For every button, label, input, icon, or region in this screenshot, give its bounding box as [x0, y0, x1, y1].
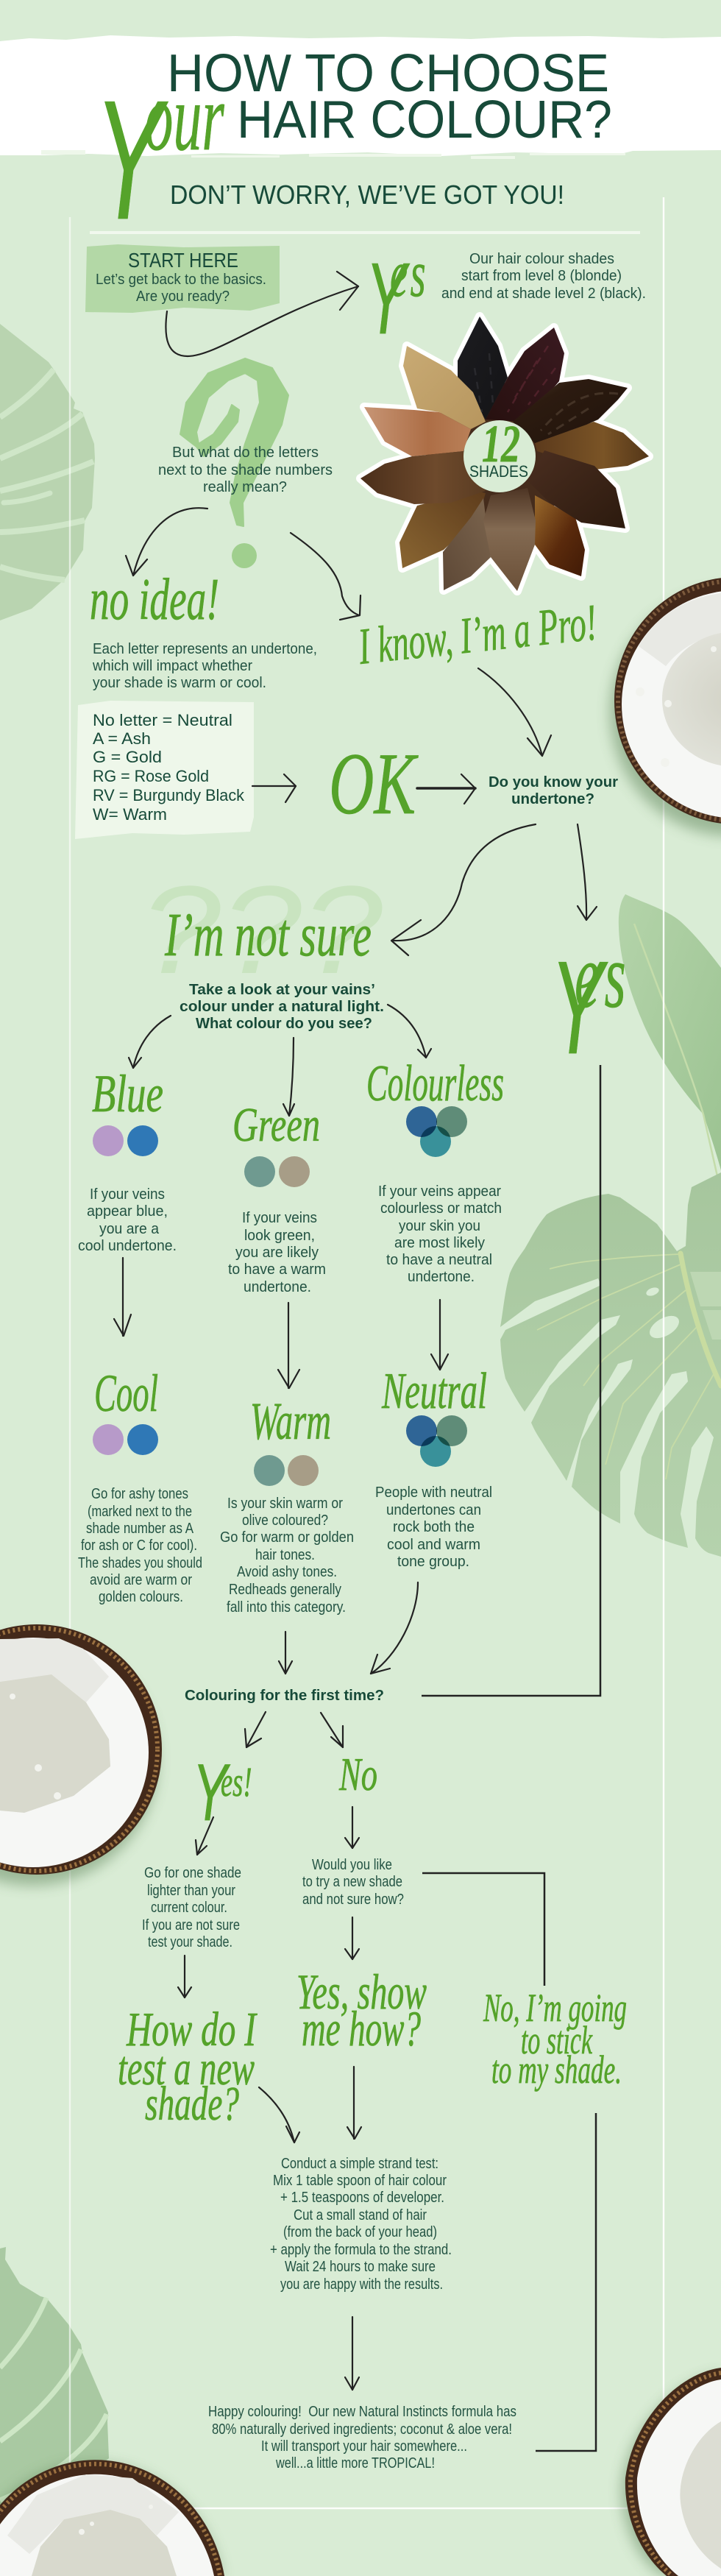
text: warm: Go for warm or golden	[220, 1529, 354, 1546]
arrow: test to happy colouring	[345, 2317, 359, 2390]
script: OK: OK	[329, 735, 419, 832]
icon: question mark	[180, 358, 288, 568]
column: cool	[78, 1364, 202, 1605]
leaf: monstera right	[500, 1172, 721, 1557]
text: blue: you are a	[99, 1221, 160, 1237]
script: no idea: no idea!	[90, 567, 219, 632]
script: how do I test a new shade: How do I	[126, 2003, 258, 2056]
swatches: cool	[93, 1424, 158, 1455]
text: shade levels: start from level 8 (blonde)	[461, 268, 622, 284]
text: green: If your veins	[242, 1210, 317, 1226]
swatches: warm	[254, 1455, 319, 1486]
text: warm: olive coloured?	[242, 1512, 328, 1529]
script: Yes!: es!	[221, 1759, 252, 1805]
column: green: Green	[232, 1098, 320, 1152]
text: strand test: Wait 24 hours to make sure	[285, 2259, 436, 2275]
text: one shade lighter: lighter than your	[147, 1883, 235, 1899]
script: how do I test a new shade: test a new	[118, 2042, 255, 2095]
text: warm: fall into this category.	[227, 1599, 346, 1616]
column: neutral: Neutral	[381, 1363, 487, 1420]
text: cool: (marked next to the	[88, 1504, 192, 1520]
panel: letter key: G = Gold	[93, 748, 162, 766]
column: colourless	[366, 1055, 504, 1285]
script: how do I test a new shade: shade?	[145, 2077, 239, 2131]
leaf: bottom left	[0, 2247, 109, 2508]
start here box: Let’s get back to the basics.	[96, 272, 266, 288]
arrow: to yes	[245, 1712, 266, 1747]
title script word: Your: our	[144, 65, 225, 171]
arrow: to big yes	[578, 824, 597, 920]
script: yes show me how: Yes, show	[296, 1964, 427, 2020]
script: Yes: Y	[366, 242, 410, 355]
start here box: Are you ready?	[136, 289, 230, 305]
question: do you know your undertone: undertone?	[511, 791, 594, 807]
question: look at your veins: Take a look at your vains’	[189, 982, 375, 998]
panel: letter key: No letter = Neutral	[93, 711, 232, 729]
text: try a new shade: to try a new shade	[302, 1874, 402, 1890]
text: happy colouring: 80% naturally derived ingredients; coconut & aloe vera!	[212, 2421, 512, 2438]
text: blue: appear blue,	[87, 1203, 168, 1220]
hair swatches flower: SHADES	[469, 462, 528, 481]
coconut: top right	[610, 577, 721, 836]
text: each letter	[92, 641, 317, 691]
question: look at your veins: colour under a natural light.	[180, 999, 384, 1015]
text: shade levels	[441, 251, 646, 302]
text: one shade lighter: If you are not sure	[142, 1917, 240, 1933]
text: what do the letters mean: But what do the letters	[172, 445, 319, 461]
text: green: undertone.	[244, 1279, 311, 1295]
script: big Yes: Y	[550, 935, 608, 1082]
text: warm: hair tones.	[255, 1547, 315, 1563]
text: cool	[78, 1486, 202, 1605]
arrow: to green	[283, 1038, 294, 1116]
script: No: No	[338, 1748, 377, 1800]
arrow: to I know	[291, 533, 360, 620]
text: warm: Avoid ashy tones.	[237, 1564, 337, 1580]
text: green	[228, 1210, 326, 1295]
arrow: to no	[321, 1713, 343, 1747]
script: yes show me how	[296, 1964, 427, 2056]
text: try a new shade: Would you like	[312, 1857, 392, 1873]
text: each letter: your shade is warm or cool.	[93, 675, 266, 691]
hair swatches flower	[360, 316, 649, 591]
text: colourless: your skin you	[399, 1218, 480, 1234]
start here box: START HERE	[128, 249, 238, 272]
text: strand test: Cut a small stand of hair	[294, 2207, 427, 2223]
text: cool: for ash or C for cool).	[81, 1538, 197, 1554]
swatches: blue	[93, 1125, 158, 1156]
text: happy colouring: Happy colouring! Our new Natural Instincts formula has	[208, 2404, 516, 2420]
column: cool: Cool	[94, 1364, 158, 1423]
text: happy colouring	[208, 2404, 516, 2471]
arrow: how do I to test	[259, 2087, 299, 2142]
text: one shade lighter: current colour.	[151, 1900, 227, 1916]
text: colourless: to have a neutral	[386, 1252, 492, 1268]
arrow: to I'm not sure	[391, 824, 536, 955]
text: colourless: are most likely	[394, 1235, 485, 1251]
connector: stick to happy colouring	[536, 2113, 596, 2451]
arrow: show me to test	[347, 2067, 361, 2139]
coconut: bottom left	[0, 2460, 224, 2576]
arrow: key to OK	[252, 774, 296, 802]
column: blue: Blue	[92, 1064, 163, 1123]
text: one shade lighter: test your shade.	[148, 1934, 232, 1950]
decorative question marks: ???	[140, 860, 383, 1000]
script: no I'm going to stick: No, I’m going	[483, 1986, 627, 2030]
text: colourless: colourless or match	[380, 1200, 502, 1217]
arrow: OK to undertone	[417, 774, 475, 804]
text: strand test: you are happy with the results.	[280, 2276, 443, 2293]
text: one shade lighter	[142, 1865, 241, 1950]
text: happy colouring: It will transport your hair somewhere...	[261, 2438, 467, 2455]
coconut: middle left	[0, 1624, 162, 1886]
column: warm	[220, 1392, 354, 1616]
text: neutral	[375, 1485, 492, 1570]
text: what do the letters mean	[158, 445, 333, 495]
text: happy colouring: well...a little more TROPICAL!	[275, 2455, 435, 2471]
column: blue	[78, 1064, 177, 1254]
start here box	[85, 244, 280, 313]
text: strand test	[270, 2156, 452, 2293]
question: do you know your undertone	[489, 774, 618, 807]
coconut: bottom right	[622, 2368, 721, 2576]
title: HOW TO CHOOSE	[167, 44, 609, 103]
text: warm	[220, 1496, 354, 1616]
text: strand test: + 1.5 teaspoons of developer.	[280, 2190, 444, 2206]
panel: letter key: RG = Rose Gold	[93, 767, 209, 785]
text: cool: golden colours.	[99, 1589, 183, 1605]
text: warm: Is your skin warm or	[227, 1496, 343, 1512]
script: yes show me how: me how?	[302, 2000, 421, 2056]
text: strand test: (from the back of your head)	[283, 2224, 437, 2240]
text: each letter: Each letter represents an undertone,	[93, 641, 317, 657]
white title band	[0, 35, 721, 156]
column: neutral	[375, 1363, 492, 1570]
text: blue: If your veins	[90, 1186, 165, 1203]
text: neutral: cool and warm	[387, 1537, 480, 1553]
text: blue: cool undertone.	[78, 1238, 177, 1254]
text: colourless: If your veins appear	[378, 1183, 501, 1200]
text: green: look green,	[244, 1228, 315, 1244]
arrow: to colourless	[388, 1005, 431, 1058]
white frame lines	[70, 197, 664, 2508]
band brush streaks	[41, 150, 625, 159]
title: HAIR COLOUR?	[237, 91, 612, 149]
text: strand test: + apply the formula to the strand.	[270, 2242, 452, 2258]
arrow: pro to undertone	[478, 668, 551, 756]
arrow: to blue	[129, 1016, 171, 1068]
script: Yes: es	[390, 238, 428, 311]
text: warm: Redheads generally	[229, 1582, 341, 1598]
text: shade levels: and end at shade level 2 (black).	[441, 286, 646, 302]
script: no I'm going to stick	[483, 1986, 627, 2092]
text: cool: shade number as A	[86, 1521, 194, 1537]
question: do you know your undertone: Do you know your	[489, 774, 618, 790]
arrow: text to how do I	[178, 1956, 191, 1998]
title	[167, 44, 612, 149]
column: colourless: Colourless	[366, 1055, 504, 1112]
question: look at your veins: What colour do you see?	[196, 1016, 372, 1032]
leaf: banana right	[619, 894, 721, 1192]
text: neutral: People with neutral	[375, 1485, 492, 1501]
text: cool: The shades you should	[78, 1555, 202, 1571]
arrow: green to warm	[278, 1303, 299, 1388]
panel: letter key: W= Warm	[93, 805, 167, 824]
text: shade levels: Our hair colour shades	[469, 251, 614, 267]
swatches: neutral	[406, 1415, 467, 1467]
arrow: to no idea	[126, 508, 207, 576]
hair swatches flower: 12	[482, 414, 520, 473]
text: each letter: which will impact whether	[92, 658, 252, 674]
question: look at your veins	[180, 982, 384, 1032]
text: strand test: Conduct a simple strand test:	[281, 2156, 438, 2172]
divider under subtitle	[90, 231, 640, 234]
arrow: start to yes	[166, 272, 358, 356]
text: neutral: tone group.	[397, 1554, 469, 1570]
text: strand test: Mix 1 table spoon of hair colour	[273, 2173, 447, 2189]
text: one shade lighter: Go for one shade	[144, 1865, 241, 1881]
panel: letter key: A = Ash	[93, 729, 151, 748]
title script word: Your: Y	[94, 66, 168, 255]
column: green	[228, 1098, 326, 1295]
column: warm: Warm	[250, 1392, 331, 1451]
connector: yes to colouring	[422, 1065, 600, 1696]
text: try a new shade: and not sure how?	[302, 1892, 404, 1908]
script: no I'm going to stick: to my shade.	[491, 2048, 622, 2092]
connector: to stick line	[422, 1873, 544, 1986]
text: green: to have a warm	[228, 1262, 326, 1278]
script: no I'm going to stick: to stick	[521, 2018, 593, 2062]
text: cool: Go for ashy tones	[91, 1486, 188, 1502]
text: what do the letters mean: next to the shade numbers	[158, 462, 333, 478]
question: colouring for the first time: Colouring for the first time?	[185, 1688, 384, 1704]
text: neutral: rock both the	[393, 1519, 475, 1535]
panel: letter key: RV = Burgundy Black	[93, 786, 245, 804]
text: green: you are likely	[235, 1245, 319, 1261]
script: I'm not sure: I’m not sure	[164, 901, 372, 969]
arrow: yes to text	[196, 1817, 213, 1855]
subtitle: DON’T WORRY, WE’VE GOT YOU!	[170, 180, 564, 210]
arrow: text to yes show me	[345, 1917, 359, 1959]
arrow: no to text	[345, 1807, 359, 1848]
text: colourless	[378, 1183, 502, 1285]
panel: letter key	[75, 701, 254, 839]
leaf: top left	[0, 324, 95, 620]
text: neutral: undertones can	[386, 1502, 481, 1518]
swatches: colourless	[406, 1106, 467, 1157]
arrow: neutral to colouring	[371, 1582, 418, 1674]
text: blue	[78, 1186, 177, 1254]
text: cool: avoid are warm or	[90, 1572, 192, 1588]
script: how do I test a new shade	[118, 2003, 258, 2131]
arrow: blue to cool	[114, 1258, 131, 1336]
text: try a new shade	[302, 1857, 404, 1908]
script: Yes!: Y	[193, 1747, 231, 1838]
script: big Yes: es	[575, 926, 631, 1027]
arrow: warm to colouring	[279, 1632, 292, 1674]
text: colourless: undertone.	[408, 1269, 475, 1285]
text: what do the letters mean: really mean?	[203, 479, 287, 495]
swatches: green	[244, 1156, 310, 1187]
arrow: colourless to neutral	[431, 1300, 448, 1370]
